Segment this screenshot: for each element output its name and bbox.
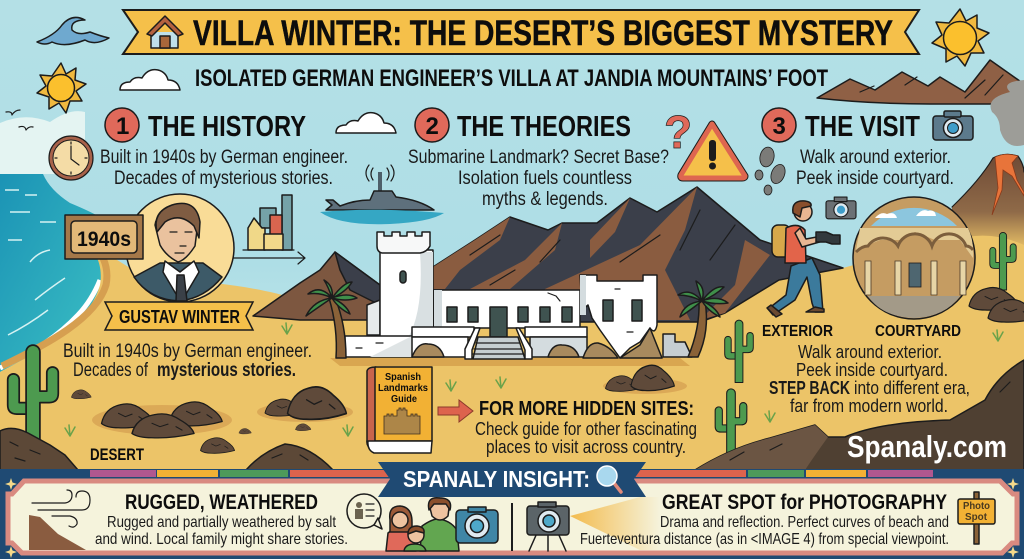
icon: sun left — [37, 63, 86, 113]
text block: myths & legends. — [482, 189, 608, 210]
villa main block — [434, 290, 580, 337]
heading: THE HISTORY — [148, 111, 306, 143]
villa front walls — [412, 327, 587, 357]
icon: warning triangle — [681, 124, 745, 178]
number badge 1: 1 — [116, 113, 129, 140]
villa winter building — [330, 232, 692, 366]
heading: THE THEORIES — [457, 111, 631, 143]
courtyard circle — [853, 197, 975, 319]
villa tower — [367, 232, 433, 338]
villa ground shadow — [330, 358, 690, 366]
arrow: portrait to villa — [233, 252, 305, 264]
icon: magnifier — [597, 466, 621, 492]
pale coastal clouds — [0, 111, 85, 174]
icon: submarine — [320, 165, 444, 224]
labels: exterior and courtyard: EXTERIOR — [762, 323, 833, 340]
hidden sites text: FOR MORE HIDDEN SITES: — [479, 398, 694, 420]
panel: great spot for photography — [527, 491, 995, 551]
far mountains — [817, 60, 1024, 104]
text block — [100, 147, 348, 189]
visit body text — [769, 342, 970, 416]
icon: photo spot sign: Photo — [963, 501, 990, 512]
icon: wind and cliff — [29, 490, 90, 550]
icon: photo spot sign: Spot — [965, 512, 988, 523]
icon: camera on tripod — [527, 502, 569, 551]
text block — [796, 147, 954, 189]
icon: photo spot sign — [958, 492, 995, 544]
1940s plaque — [65, 215, 143, 259]
icon: birds — [6, 110, 33, 130]
rocks right — [969, 287, 1024, 322]
labels: exterior and courtyard — [762, 323, 961, 340]
rock hill bottom left — [0, 428, 78, 470]
number badge 3 — [762, 108, 796, 142]
section 1: the history — [100, 108, 348, 189]
hidden sites text: Check guide for other fascinating — [475, 419, 697, 439]
central mountain range — [430, 187, 843, 322]
text: Drama and reflection. Perfect curves of beach and — [660, 514, 949, 531]
villa stairs — [465, 328, 532, 359]
volcano — [950, 154, 1024, 250]
icon: speech bubble — [347, 494, 382, 529]
icon: camera heading — [933, 111, 973, 140]
divider — [511, 503, 513, 551]
palm tree left — [306, 280, 357, 358]
panel: rugged weathered — [29, 490, 498, 551]
bottom insight band — [0, 462, 1024, 559]
visit body text: Peek inside courtyard. — [796, 360, 948, 380]
visit body text: STEP BACK — [769, 378, 850, 398]
icon: family — [386, 498, 459, 551]
light beam — [570, 497, 660, 550]
icon: cloud top — [120, 70, 180, 90]
icon: footprints — [755, 146, 788, 195]
text block: Decades of mysterious stories. — [114, 168, 333, 189]
text block: Submarine Landmark? Secret Base? — [408, 147, 669, 168]
subtitle: ISOLATED GERMAN ENGINEER’S VILLA AT JANDIA MOUNTAINS’ FOOT — [195, 65, 828, 92]
icon: small camera — [826, 197, 856, 219]
heading: RUGGED, WEATHERED — [125, 491, 318, 514]
decorative sparkle stars — [5, 478, 1019, 558]
icon: cloud middle — [336, 113, 396, 133]
cactus large left — [8, 345, 58, 456]
number badge 2: 2 — [426, 113, 439, 140]
insight panel — [8, 481, 1017, 553]
arrow: book to guide text — [438, 400, 473, 422]
text block: Walk around exterior. — [800, 147, 951, 168]
left mountain — [253, 252, 380, 320]
insight ribbon: SPANALY INSIGHT: — [403, 466, 590, 492]
text: Fuerteventura distance (as in <IMAGE 4) from special viewpoint. — [580, 531, 949, 548]
text block: Peek inside courtyard. — [796, 168, 954, 189]
heading: THE VISIT — [805, 111, 920, 143]
history body text — [63, 341, 312, 381]
name banner — [105, 302, 253, 330]
labels: exterior and courtyard: COURTYARD — [875, 323, 961, 340]
villa low left wall — [345, 336, 412, 357]
text — [95, 514, 348, 548]
guide book: Guide — [391, 393, 417, 405]
desert rocks — [71, 365, 687, 453]
text: Rugged and partially weathered by salt — [107, 514, 336, 531]
icon: clock — [49, 136, 93, 180]
guide book: Landmarks — [378, 382, 428, 394]
volcano smoke — [990, 80, 1024, 146]
portrait: gustav winter — [126, 194, 234, 302]
guide book: Spanish — [385, 371, 421, 383]
rock hill bottom right — [695, 360, 1024, 472]
heading: GREAT SPOT for PHOTOGRAPHY — [662, 491, 947, 514]
cactus lower middle — [715, 389, 747, 458]
palm tree right — [678, 281, 728, 357]
guide book — [367, 367, 432, 453]
colour strip — [90, 470, 933, 477]
name banner: GUSTAV WINTER — [119, 307, 240, 327]
1940s plaque: 1940s — [77, 228, 131, 251]
text block: Built in 1940s by German engineer. — [100, 147, 348, 168]
history body text: mysterious stories. — [157, 360, 296, 381]
sand ground — [0, 236, 1024, 480]
icon: wave — [37, 17, 109, 45]
hidden sites text — [475, 398, 697, 457]
number badge 2 — [415, 108, 449, 142]
rock hill bottom centre — [246, 444, 333, 470]
grass tufts — [65, 323, 1003, 436]
insight ribbon — [378, 462, 646, 497]
text: and wind. Local family might share stories. — [95, 531, 348, 548]
villa right ruined block — [580, 275, 692, 358]
icon: question mark: ? — [664, 106, 692, 158]
title banner — [123, 10, 919, 54]
hidden sites text: places to visit across country. — [486, 437, 686, 457]
cactus mid right — [725, 320, 753, 382]
text block — [408, 147, 669, 210]
history body text: Decades of — [73, 360, 149, 381]
icon: blue camera — [456, 507, 498, 543]
visit body text: into different era, — [854, 378, 970, 398]
number badge 1 — [105, 108, 139, 142]
icon: house — [147, 16, 183, 48]
visit body text: Walk around exterior. — [798, 342, 942, 362]
sea — [0, 174, 105, 372]
cactus right — [990, 232, 1016, 290]
visit body text: far from modern world. — [790, 396, 948, 416]
desert label: DESERT — [90, 445, 144, 464]
history body text: Built in 1940s by German engineer. — [63, 341, 312, 362]
number badge 3: 3 — [772, 113, 786, 140]
text block: Isolation fuels countless — [458, 168, 632, 189]
section 2: the theories — [408, 108, 669, 210]
traveler — [767, 201, 840, 317]
icon: city buildings — [243, 195, 294, 250]
text — [580, 514, 949, 548]
icon: sun right — [932, 9, 989, 66]
section 3: the visit — [762, 108, 954, 189]
